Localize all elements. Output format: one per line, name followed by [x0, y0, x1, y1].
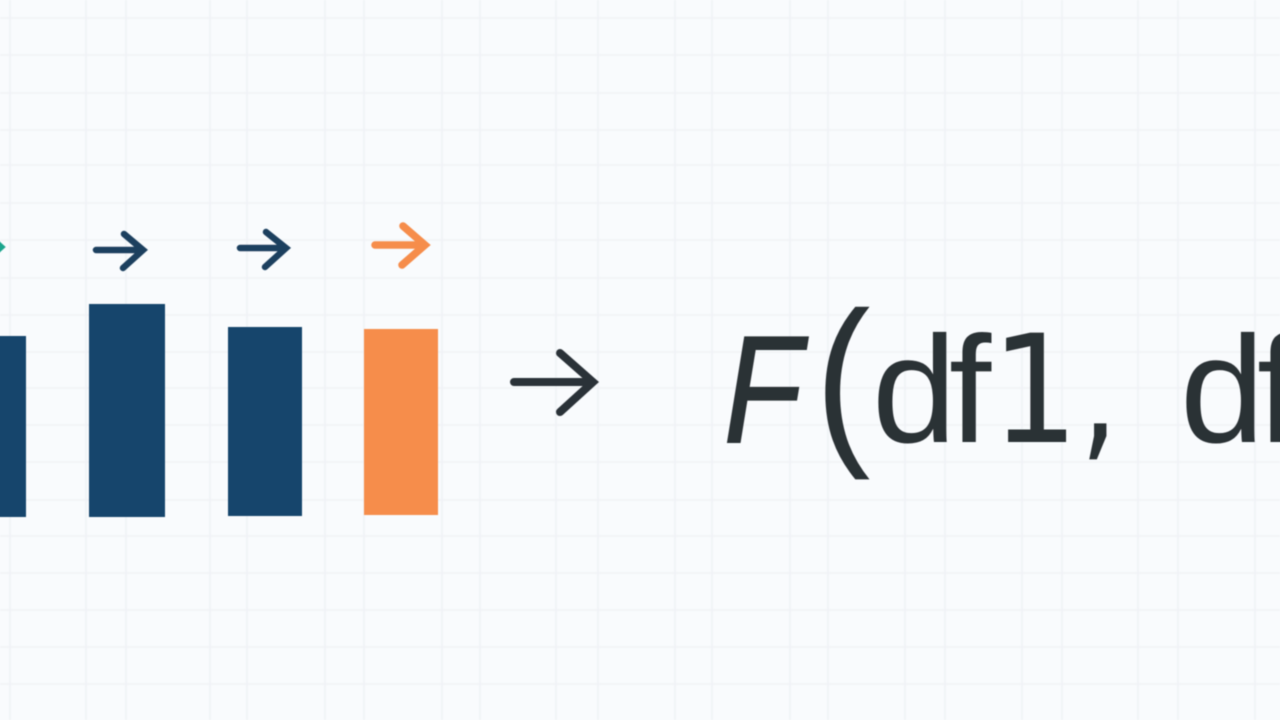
formula text: d — [872, 305, 957, 475]
formula text: d — [1180, 305, 1265, 475]
formula text: 1 — [991, 303, 1079, 477]
formula text: , — [1080, 304, 1118, 478]
arrow: bars to formula — [514, 353, 593, 412]
formula text: F — [724, 304, 809, 474]
bar: orange highlighted — [364, 329, 438, 515]
bar: third navy — [228, 327, 302, 516]
formula text: f — [949, 305, 992, 475]
formula text: ( — [815, 274, 870, 481]
arrow: over orange bar — [375, 226, 425, 265]
bar: partial left navy — [0, 336, 26, 517]
arrow: teal partial — [0, 238, 2, 256]
formula text — [724, 274, 1280, 481]
arrow: over second bar — [96, 234, 143, 268]
arrow: over third bar — [240, 232, 286, 267]
bar: second navy — [89, 304, 165, 517]
